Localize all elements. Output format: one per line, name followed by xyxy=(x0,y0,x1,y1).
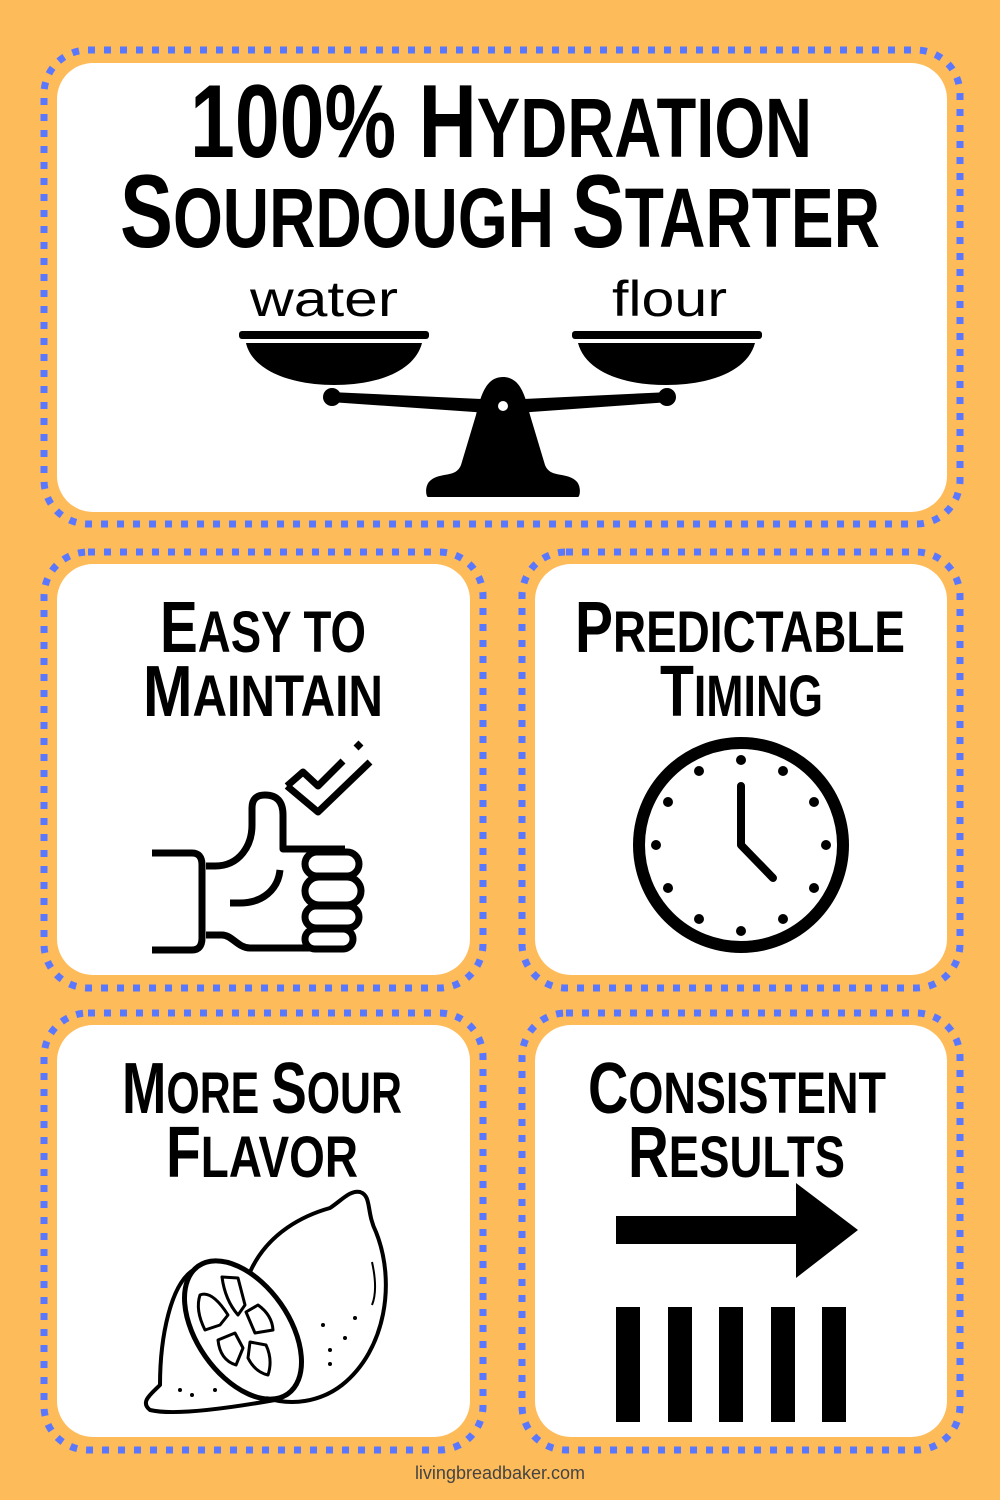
label: flour: flour xyxy=(612,271,727,327)
icon: bars xyxy=(616,1307,846,1422)
heading xyxy=(143,588,383,732)
heading: RESULTS xyxy=(628,1113,845,1193)
panel: top title xyxy=(44,50,960,524)
heading xyxy=(588,1049,886,1193)
heading: CONSISTENT xyxy=(588,1049,886,1129)
title line 1: 100% HYDRATION xyxy=(190,64,812,180)
icon: clock xyxy=(639,743,843,947)
icon: balance scale xyxy=(239,331,762,497)
heading xyxy=(575,588,905,732)
title line 2: SOURDOUGH STARTER xyxy=(120,154,880,270)
footer credit: livingbreadbaker.com xyxy=(415,1463,585,1483)
heading: MAINTAIN xyxy=(143,652,383,732)
panel: more sour flavor xyxy=(44,1013,483,1450)
heading: EASY TO xyxy=(160,588,366,668)
heading xyxy=(122,1049,402,1193)
heading: PREDICTABLE xyxy=(575,588,905,668)
icon: arrow xyxy=(616,1183,858,1278)
panel: predictable timing xyxy=(522,552,960,988)
heading: TIMING xyxy=(660,652,823,732)
panel: consistent results xyxy=(522,1013,960,1450)
panel: easy to maintain xyxy=(44,552,483,988)
icon: thumbs up with check xyxy=(152,743,370,950)
heading: FLAVOR xyxy=(166,1113,358,1193)
icon: lemons xyxy=(146,1192,386,1420)
heading: MORE SOUR xyxy=(122,1049,402,1129)
label: water: water xyxy=(249,271,398,327)
